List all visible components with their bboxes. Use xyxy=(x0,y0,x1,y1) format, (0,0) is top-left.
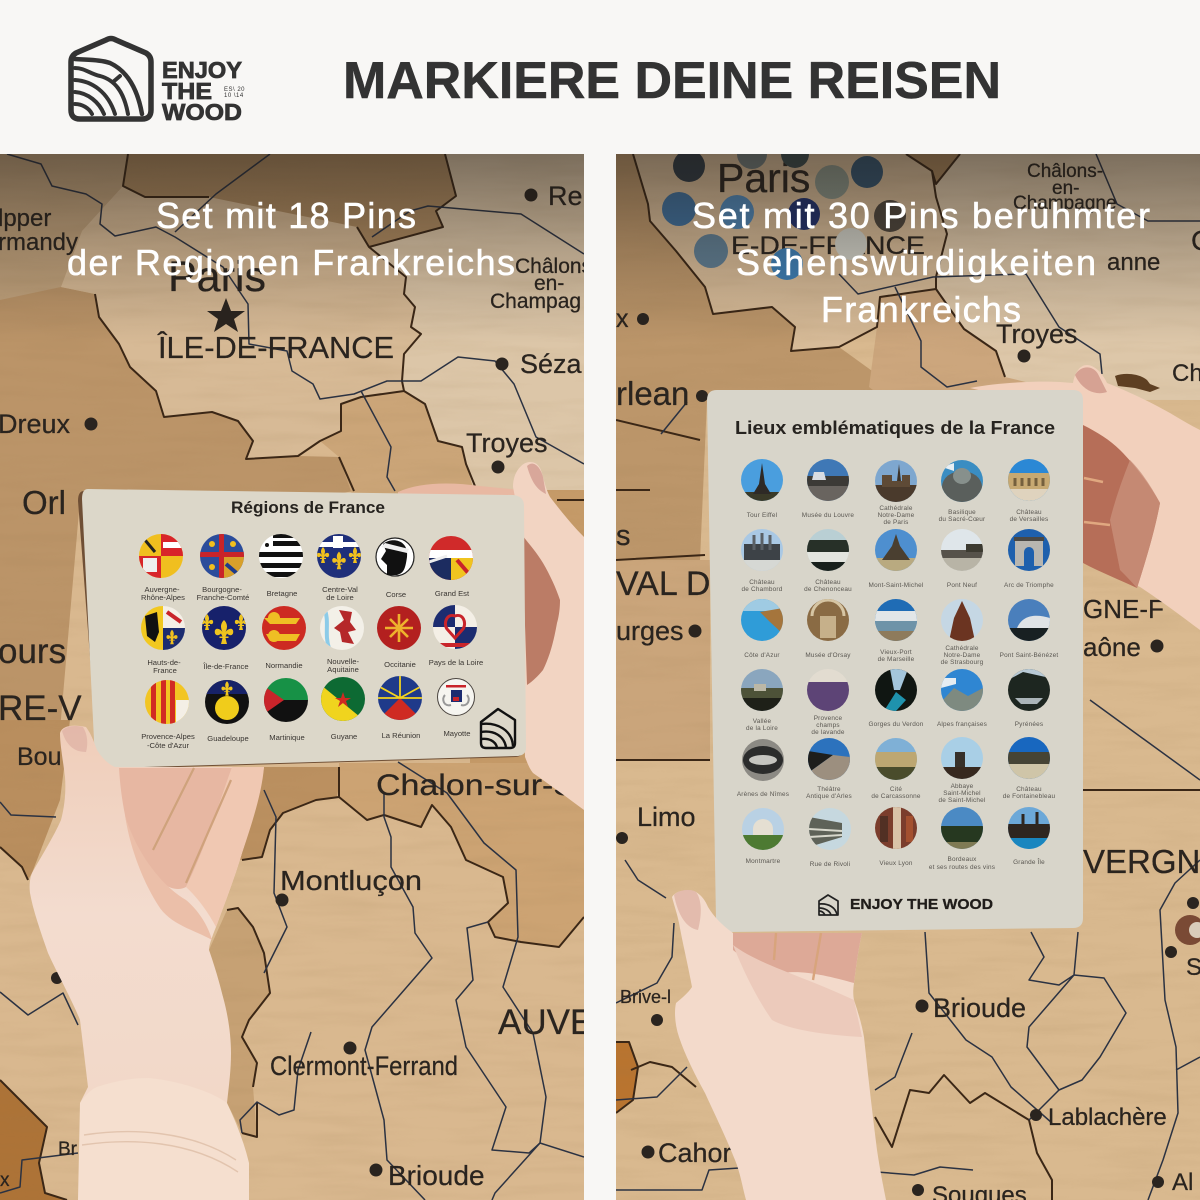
wordmark: THE xyxy=(162,78,212,104)
pin: Arènes de Nîmes xyxy=(737,739,789,798)
map labels: Champag xyxy=(490,290,581,313)
hand: right hand behind card xyxy=(398,462,584,810)
pin: Pyrénées xyxy=(1008,669,1050,728)
pin: Abbaye Saint-Michel de Saint-Michel: Saint-Michel xyxy=(943,790,981,797)
map labels xyxy=(616,155,1200,1200)
map labels: AUVE xyxy=(498,1003,593,1042)
map labels: Cahor xyxy=(658,1138,732,1168)
map labels: Paris xyxy=(168,253,266,301)
region borders xyxy=(616,154,1200,1200)
icon: small house xyxy=(819,895,838,915)
pin: Alpes françaises: Alpes françaises xyxy=(937,721,987,728)
flag: Corse xyxy=(376,538,414,599)
map labels: Paris xyxy=(717,155,810,201)
pin: Cité de Carcassonne: de Carcassonne xyxy=(871,793,921,800)
flag: Guadeloupe xyxy=(205,680,249,743)
pin: Basilique du Sacré-Cœur: Basilique xyxy=(948,509,976,516)
flag: Bourgogne-Franche-Comté: Bourgogne- xyxy=(202,585,242,594)
flag: Mayotte: MAYOTTE xyxy=(448,684,464,688)
flag: Hauts-de-France: France xyxy=(153,666,177,675)
pin: Château de Fontainebleau: Château xyxy=(1016,786,1042,793)
flag: Centre-Val de Loire: Centre-Val xyxy=(322,585,358,594)
map labels: Re xyxy=(548,181,583,211)
pin: Cathédrale Notre-Dame de Paris: de Paris xyxy=(883,519,909,526)
pin: Côte d'Azur xyxy=(741,599,783,659)
map labels: Brive-l xyxy=(620,987,671,1007)
rivers xyxy=(0,154,584,1200)
pin: Musée d'Orsay: Musée d'Orsay xyxy=(805,652,851,659)
caption: right: Frankreichs xyxy=(821,289,1021,330)
pin: Cathédrale Notre-Dame de Paris: Cathédrale xyxy=(879,505,913,512)
pin: Château de Fontainebleau: de Fontainebleau xyxy=(1003,793,1056,800)
pin: Vallée de la Loire: Vallée xyxy=(753,718,771,725)
flag: Provence-Alpes-Côte d'Azur xyxy=(141,680,195,750)
map labels: Dreux xyxy=(0,409,71,439)
fingers and palm shading xyxy=(119,768,232,889)
pin: Arènes de Nîmes: Arènes de Nîmes xyxy=(737,791,789,798)
map labels: Bou xyxy=(17,743,61,771)
pin: Pont Neuf: Pont Neuf xyxy=(947,582,977,589)
pin: Cathédrale Notre-Dame de Strasbourg: Notre-Dame xyxy=(944,652,981,659)
pin: Château de Chenonceau: Château xyxy=(815,579,841,586)
pin: Cathédrale Notre-Dame de Paris: Notre-Dame xyxy=(878,512,915,519)
map labels: Limo xyxy=(637,802,696,832)
pin: Mont-Saint-Michel xyxy=(869,529,923,589)
pin: Abbaye Saint-Michel de Saint-Michel: Abbaye xyxy=(951,783,974,790)
pin: Pont Neuf xyxy=(941,529,983,589)
caption: right xyxy=(692,195,1150,330)
map labels: GNE-F xyxy=(1083,594,1164,624)
flag: Martinique xyxy=(264,678,308,742)
map labels: E-DE-FRANCE xyxy=(731,232,925,260)
flag: Auvergne-Rhône-Alpes xyxy=(139,534,185,602)
map labels: aône xyxy=(1083,632,1141,662)
icon: house with wood rings xyxy=(71,38,151,119)
flag: Pays de la Loire xyxy=(429,605,483,667)
title: MARKIERE DEINE REISEN xyxy=(343,52,1001,110)
map labels: anne xyxy=(1107,249,1160,276)
flag: Normandie: Normandie xyxy=(265,661,303,670)
map labels: Lablachère xyxy=(1048,1104,1167,1131)
icon: wood house logo on card xyxy=(481,709,515,748)
map labels: Troyes xyxy=(996,319,1078,349)
pin: Rue de Rivoli: Rue de Rivoli xyxy=(810,861,850,868)
hand: lower left hand with sleeve xyxy=(30,726,264,1200)
pin: Château de Chambord xyxy=(741,529,783,593)
wordmark: ENJOY xyxy=(162,57,242,83)
pin: Arc de Triomphe xyxy=(1004,529,1054,589)
pin: Château de Chenonceau: de Chenonceau xyxy=(804,586,852,593)
pin: Musée d'Orsay xyxy=(805,599,851,659)
flag: Nouvelle-Aquitaine: Nouvelle- xyxy=(327,657,360,666)
map labels: urges xyxy=(616,616,684,646)
pin: Provence champs de lavande: Provence xyxy=(814,715,843,722)
pin: Grande Île xyxy=(1008,807,1050,866)
card logo: Enjoy the Wood: ENJOY THE WOOD xyxy=(850,896,993,913)
flag: Guyane xyxy=(321,677,365,741)
pin: Théâtre Antique d'Arles xyxy=(806,738,852,800)
flag: Provence-Alpes-Côte d'Azur: Provence-Alpes xyxy=(141,732,195,741)
pin: Vallée de la Loire xyxy=(741,669,783,732)
map labels: Montluçon xyxy=(280,865,422,896)
pin: Abbaye Saint-Michel de Saint-Michel xyxy=(938,737,986,804)
pin: Château de Versailles: Château xyxy=(1016,509,1042,516)
map labels: s xyxy=(616,520,630,552)
pin: Pont Saint-Bénézet xyxy=(1000,599,1058,659)
map labels: Séza xyxy=(520,349,583,379)
pin: Cathédrale Notre-Dame de Strasbourg xyxy=(941,599,984,666)
wordmark: WOOD xyxy=(162,99,242,125)
flag: Bourgogne-Franche-Comté: Franche-Comté xyxy=(197,593,249,602)
pin: Montmartre: Montmartre xyxy=(746,858,781,865)
map labels: Châlons xyxy=(515,255,592,278)
pin: Musée du Louvre xyxy=(802,459,854,519)
pin: Cathédrale Notre-Dame de Strasbourg: de Strasbourg xyxy=(941,659,984,666)
panel: right photo with landmark pins xyxy=(616,139,1200,1200)
hand: lower hand holding card xyxy=(672,890,886,1200)
pin: Château de Chambord: Château xyxy=(749,579,775,586)
map labels: Chalon-sur-S xyxy=(376,769,576,802)
flag: Martinique: Martinique xyxy=(269,733,305,742)
card heading: Régions de France xyxy=(231,498,385,517)
card: Régions de France xyxy=(78,489,526,769)
pin: Théâtre Antique d'Arles: Théâtre xyxy=(817,786,841,793)
flag: Nouvelle-Aquitaine: Aquitaine xyxy=(327,665,359,674)
pin: Abbaye Saint-Michel de Saint-Michel: de Saint-Michel xyxy=(938,797,986,804)
caption: left: der Regionen Frankreichs xyxy=(67,242,515,283)
pin: Provence champs de lavande: champs xyxy=(816,722,840,729)
top shade xyxy=(616,154,1200,344)
flag: Auvergne-Rhône-Alpes: Auvergne- xyxy=(144,585,180,594)
pin: Bordeaux et ses routes des vins: et ses routes des vins xyxy=(929,864,995,871)
wooden map background xyxy=(0,154,584,1200)
map labels: Champagne xyxy=(1013,193,1117,214)
map labels: rmandy xyxy=(0,229,78,256)
pin: Cathédrale Notre-Dame de Paris xyxy=(875,460,917,526)
logo: Enjoy the Wood xyxy=(71,38,245,125)
map labels: Orl xyxy=(22,484,66,521)
pin: Théâtre Antique d'Arles: Antique d'Arles xyxy=(806,793,852,800)
map labels: RE-V xyxy=(0,689,82,728)
pin: Château de Chambord: de Chambord xyxy=(742,586,783,593)
flag: Grand Est: Grand Est xyxy=(435,589,470,598)
flag: Guadeloupe: Guadeloupe xyxy=(207,734,249,743)
pin: Gorges du Verdon: Gorges du Verdon xyxy=(868,721,924,728)
card heading: Lieux emblématiques de la France xyxy=(735,418,1055,438)
pin: Cathédrale Notre-Dame de Strasbourg: Cathédrale xyxy=(945,645,979,652)
pin: Arc de Triomphe: Arc de Triomphe xyxy=(1004,582,1054,589)
pin: Provence champs de lavande xyxy=(807,669,849,736)
flag: Hauts-de-France: Hauts-de- xyxy=(147,658,181,667)
pin: Pont Saint-Bénézet: Pont Saint-Bénézet xyxy=(1000,652,1058,659)
flag: Mayotte: Mayotte xyxy=(443,729,471,738)
lower left top piece xyxy=(0,720,70,880)
wooden map background xyxy=(616,154,1200,1200)
pin: Musée du Louvre: Musée du Louvre xyxy=(802,512,854,519)
flag: Centre-Val de Loire: de Loire xyxy=(326,593,354,602)
flag: Provence-Alpes-Côte d'Azur: -Côte d'Azur xyxy=(147,741,189,750)
sleeve xyxy=(78,1102,249,1200)
flag: Auvergne-Rhône-Alpes: Rhône-Alpes xyxy=(141,593,185,602)
pin: Montmartre xyxy=(742,808,784,865)
wordmark: ES\ 20 xyxy=(224,87,245,93)
caption: right: Sehenswürdigkeiten xyxy=(736,242,1096,283)
hand: top right fingers xyxy=(970,365,1200,630)
map labels: ÎLE-DE-FRANCE xyxy=(157,330,394,365)
map labels: Clermont-Ferrand xyxy=(270,1051,458,1081)
map labels: en- xyxy=(1052,178,1079,199)
wordmark: 10 \14 xyxy=(224,93,244,99)
pin: Bordeaux et ses routes des vins: Bordeaux xyxy=(948,856,977,863)
map labels: Br xyxy=(58,1139,78,1160)
map labels: x xyxy=(0,1170,10,1191)
caption: right: Set mit 30 Pins berühmter xyxy=(692,195,1150,236)
pin: Côte d'Azur: Côte d'Azur xyxy=(744,652,780,659)
map labels: Brioude xyxy=(933,993,1026,1023)
map labels: Brioude xyxy=(388,1160,485,1191)
pin: Château de Fontainebleau xyxy=(1003,737,1056,800)
card logo: Enjoy the Wood xyxy=(819,895,993,915)
flag: Normandie xyxy=(262,606,306,670)
flag: Hauts-de-France xyxy=(141,606,185,675)
map labels: x xyxy=(616,305,629,333)
flag: La Réunion xyxy=(378,676,422,740)
pin: Vieux Lyon: Vieux Lyon xyxy=(879,860,913,867)
pin: Basilique du Sacré-Cœur: du Sacré-Cœur xyxy=(939,516,986,523)
map labels: en- xyxy=(534,272,564,295)
card: Lieux emblématiques de la France xyxy=(707,390,1083,932)
pin: Cité de Carcassonne: Cité xyxy=(890,786,902,793)
rivers xyxy=(616,154,1200,1200)
pin: Mont-Saint-Michel: Mont-Saint-Michel xyxy=(869,582,923,589)
pin: Rue de Rivoli xyxy=(809,808,851,868)
flag: Corse: Corse xyxy=(386,590,406,599)
pin: Gorges du Verdon xyxy=(868,669,924,728)
fingers and palm shading xyxy=(733,933,862,983)
flag: Île-de-France: Île-de-France xyxy=(202,662,249,671)
pin: Château de Chenonceau xyxy=(804,529,852,593)
flag: Bretagne xyxy=(259,534,303,598)
flag: Occitanie: Occitanie xyxy=(384,660,416,669)
pin: Vieux-Port de Marseille: de Marseille xyxy=(878,656,915,663)
flag: La Réunion: La Réunion xyxy=(382,731,420,740)
map labels: Troyes xyxy=(466,428,548,458)
panel: left photo with region pins xyxy=(0,154,593,1200)
flag: Bourgogne-Franche-Comté xyxy=(197,534,249,602)
header background xyxy=(0,0,1200,154)
flag: Île-de-France xyxy=(201,606,249,671)
pin: Vieux-Port de Marseille: Vieux-Port xyxy=(880,649,912,656)
pin: Bordeaux et ses routes des vins xyxy=(929,807,995,871)
map labels: rlean xyxy=(616,375,689,412)
pin: Grande Île: Grande Île xyxy=(1013,857,1045,866)
map labels: Al xyxy=(1172,1169,1193,1196)
map labels: VAL D xyxy=(616,565,710,603)
map labels: ours xyxy=(0,632,66,671)
map labels xyxy=(0,181,593,1191)
pin: Vallée de la Loire: de la Loire xyxy=(746,725,778,732)
pin: Château de Versailles: de Versailles xyxy=(1010,516,1048,523)
pin: Cité de Carcassonne xyxy=(871,738,921,800)
flag: Guyane: Guyane xyxy=(331,732,357,741)
region borders xyxy=(0,154,584,1200)
pin: Provence champs de lavande: de lavande xyxy=(811,729,845,736)
map labels: Châlons- xyxy=(1027,161,1103,182)
pin: Vieux-Port de Marseille xyxy=(875,599,917,663)
map labels: VERGN xyxy=(1083,843,1200,880)
flag: Bretagne: Bretagne xyxy=(267,589,297,598)
caption: left: Set mit 18 Pins xyxy=(156,195,416,236)
wordmark xyxy=(162,57,245,125)
caption: left xyxy=(67,195,515,283)
flag: Grand Est xyxy=(429,536,473,598)
pin: Tour Eiffel xyxy=(741,459,783,519)
flag: Nouvelle-Aquitaine xyxy=(320,606,364,674)
pin: Pyrénées: Pyrénées xyxy=(1015,721,1043,728)
map pins xyxy=(662,139,1200,945)
pin: Basilique du Sacré-Cœur xyxy=(939,460,986,523)
pin: Vieux Lyon xyxy=(875,807,917,867)
top shade xyxy=(0,154,584,344)
flag: Pays de la Loire: Pays de la Loire xyxy=(429,658,483,667)
flag: Centre-Val de Loire xyxy=(317,534,361,602)
pin: Château de Versailles xyxy=(1008,459,1050,523)
flag: Occitanie xyxy=(377,606,421,669)
pin: Tour Eiffel: Tour Eiffel xyxy=(747,512,777,519)
flag: Mayotte xyxy=(438,678,474,738)
pin: Alpes françaises xyxy=(937,669,987,728)
